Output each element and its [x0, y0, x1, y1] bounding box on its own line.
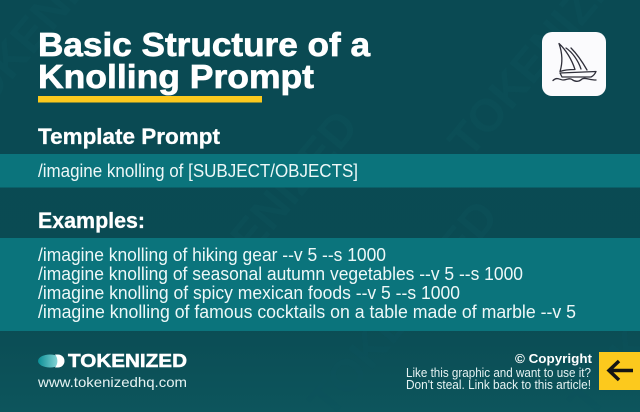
example prompts: /imagine knolling of hiking gear --v 5 --s 1000	[38, 244, 386, 265]
logo: tokenized	[38, 351, 187, 371]
example prompts: /imagine knolling of famous cocktails on a table made of marble --v 5	[38, 301, 576, 322]
copyright notice: © Copyright	[515, 351, 593, 366]
panel: examples band	[0, 238, 640, 331]
example prompts: /imagine knolling of spicy mexican foods --v 5 --s 1000	[38, 282, 460, 303]
panel: template prompt band	[0, 154, 640, 188]
icon: yellow arrow box	[599, 352, 640, 390]
copyright notice	[406, 351, 593, 392]
icon: midjourney sailboat	[542, 32, 606, 96]
heading: template prompt: Template Prompt	[38, 124, 221, 149]
title	[38, 27, 370, 96]
website url: www.tokenizedhq.com	[37, 374, 187, 390]
example prompts	[38, 244, 576, 322]
copyright notice: Don't steal. Link back to this article!	[406, 378, 591, 392]
template prompt text: /imagine knolling of [SUBJECT/OBJECTS]	[38, 160, 358, 181]
logo: tokenized: TOKENIZED	[68, 351, 187, 371]
title: Basic Structure of a	[38, 27, 370, 64]
title: Knolling Prompt	[38, 59, 314, 96]
heading: examples: Examples:	[38, 208, 145, 233]
text: TOKENIZED	[158, 100, 368, 336]
example prompts: /imagine knolling of seasonal autumn vegetables --v 5 --s 1000	[38, 263, 523, 284]
title underline	[38, 96, 262, 102]
copyright notice: Like this graphic and want to use it?	[406, 366, 591, 380]
